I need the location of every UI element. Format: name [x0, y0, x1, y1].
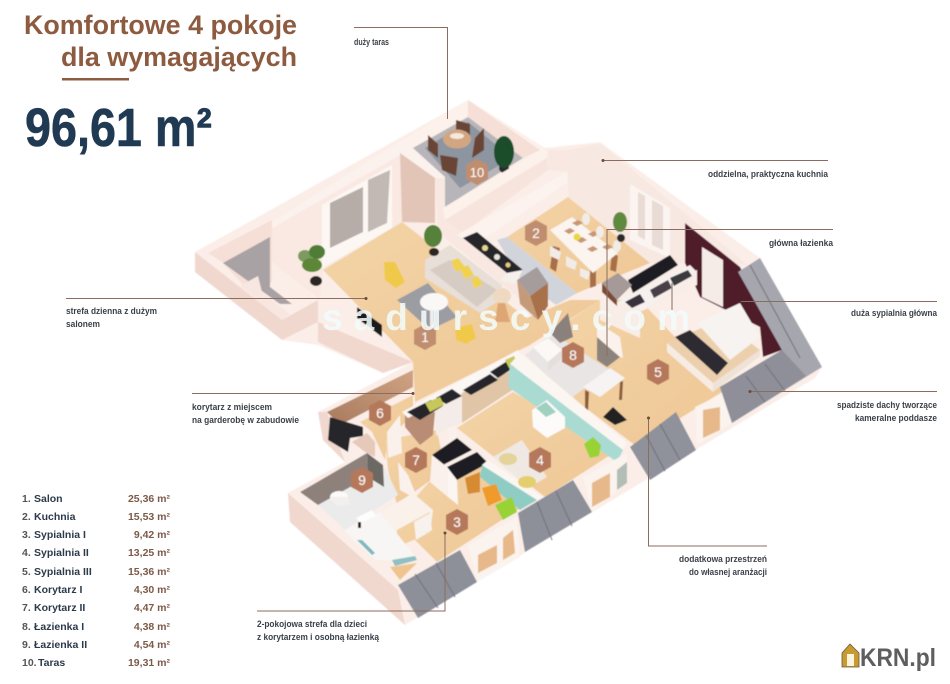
badge 8: 8: [569, 347, 577, 363]
room area list: 15,36 m²: [128, 566, 170, 578]
callout: strefa dzienna: [66, 297, 368, 329]
title: [24, 10, 297, 72]
room area list: Korytarz I: [34, 584, 83, 596]
callout: dachy: [748, 390, 937, 423]
callout: dachy: kameralne poddasze: [855, 413, 937, 423]
rug and table: [397, 283, 511, 330]
living room side wall: [435, 178, 527, 305]
badge 3: 3: [453, 514, 461, 530]
callout: sypialnia: duża sypialnia główna: [851, 308, 938, 318]
desk: [583, 368, 627, 425]
badge 9: [351, 467, 373, 493]
bedroom 4 floor: [457, 392, 618, 497]
badge 7: [405, 447, 427, 473]
room area list: 10.: [22, 657, 37, 669]
teal partition walls: [480, 353, 627, 510]
title: dla wymagających: [61, 42, 297, 72]
title underline: [62, 78, 129, 80]
callout: dodatkowa przestrzeń: dodatkowa przestrzeń: [679, 554, 767, 564]
badge 5: 5: [654, 364, 662, 380]
room area list: 1.: [22, 493, 31, 505]
title: Komfortowe 4 pokoje: [24, 10, 297, 40]
badge 8: [562, 342, 584, 368]
callout: taras: duży taras: [354, 37, 389, 47]
room area list: 3.: [22, 529, 31, 541]
badge 6: [369, 400, 391, 426]
wardrobes kids room: [430, 438, 488, 505]
room area list: 2.: [22, 511, 31, 523]
apartment shell: [195, 100, 822, 625]
wardrobe block: [600, 255, 697, 338]
bottom windows: [468, 390, 732, 582]
room area list: 25,36 m²: [128, 493, 170, 505]
floor plan: [195, 100, 822, 625]
callout: kuchnia: [602, 159, 829, 179]
living room floor: [323, 222, 600, 402]
badge 9: 9: [358, 472, 366, 488]
room area list: 8.: [22, 621, 31, 633]
callout: strefa dla dzieci: [257, 532, 446, 642]
kitchen windows: [630, 184, 670, 258]
badge 2: [525, 220, 547, 246]
terrace plant: [494, 136, 514, 173]
callout: strefa dzienna: strefa dzienna z dużym: [66, 306, 157, 316]
living room wall with windows: [272, 140, 443, 300]
room area list: Łazienka I: [34, 621, 84, 633]
room area list: 13,25 m²: [128, 547, 170, 559]
fridge cabinet: [517, 267, 548, 320]
plum accent wall: [685, 223, 782, 357]
callout: strefa dla dzieci: z korytarzem i osobną łazienką: [257, 632, 380, 642]
bathroom 9: [288, 433, 418, 588]
callout: strefa dla dzieci: 2-pokojowa strefa dla dzieci: [257, 619, 367, 629]
badge 7: 7: [412, 452, 420, 468]
watermark: sadurscy.com: [322, 297, 690, 338]
yellow armchairs: [384, 262, 476, 344]
terrace: [402, 100, 545, 207]
room area list: Sypialnia I: [34, 529, 86, 541]
kitchen counter: [463, 232, 523, 284]
TV: [357, 307, 382, 337]
outer wall faces: [195, 252, 413, 625]
room area list: Sypialnia III: [34, 566, 92, 578]
kitchen grey strip floor: [497, 237, 577, 305]
corridor 6: [327, 370, 413, 460]
callout: kuchnia: oddzielna, praktyczna kuchnia: [708, 169, 829, 179]
bedroom window: [702, 247, 723, 307]
room area list: [22, 493, 171, 669]
callout: strefa dzienna: salonem: [66, 319, 100, 329]
callout: łazienka: główna łazienka: [769, 238, 834, 248]
bedroom 3 furniture: [380, 472, 517, 547]
badge 10: [466, 159, 488, 185]
badge 1: 1: [421, 329, 429, 345]
room badges: [351, 159, 669, 535]
bedroom 5 floor: [555, 300, 725, 446]
callout: korytarz: korytarz z miejscem: [192, 402, 272, 412]
room area list: 4.: [22, 547, 31, 559]
corridor 7 floor: [385, 430, 445, 505]
badge 4: [529, 447, 551, 473]
wardrobes corridor: [402, 350, 522, 445]
room area list: Salon: [34, 493, 63, 505]
wall between terrace and kitchen: [443, 150, 568, 245]
badge 5: [647, 359, 669, 385]
room area list: 15,53 m²: [128, 511, 170, 523]
room area list: 4,30 m²: [134, 584, 171, 596]
kitchen plant: [613, 212, 627, 242]
room area list: 4,54 m²: [134, 639, 171, 651]
plants: [298, 225, 442, 286]
icon: house: [842, 644, 859, 667]
room area list: Łazienka II: [34, 639, 87, 651]
room area list: 19,31 m²: [128, 657, 170, 669]
callout: korytarz: [192, 392, 414, 425]
callout: dodatkowa przestrzeń: do własnej aranżacji: [689, 567, 767, 577]
room area list: Sypialnia II: [34, 547, 89, 559]
badge 3: [446, 509, 468, 535]
terrace table and chairs: [428, 120, 484, 176]
callout: łazienka: [607, 230, 834, 356]
bedroom 3 floor: [395, 465, 520, 562]
room area list: 4,38 m²: [134, 621, 171, 633]
room area list: 6.: [22, 584, 31, 596]
badge 4: 4: [536, 452, 544, 468]
room area list: Kuchnia: [34, 511, 76, 523]
roofs: [398, 258, 822, 618]
room area list: 5.: [22, 566, 31, 578]
dining table: [550, 213, 621, 288]
kitchen floor: [507, 197, 650, 293]
room area list: 9.: [22, 639, 31, 651]
bathroom 8: [520, 313, 623, 408]
bedroom 4 furniture: [493, 400, 601, 488]
callout: taras: [354, 28, 448, 119]
corridor doors: [387, 415, 456, 500]
total area: 96,61 m²: [25, 98, 212, 158]
sofa: [425, 245, 502, 313]
callout: dachy: spadziste dachy tworzące: [837, 400, 937, 410]
bed: [667, 303, 760, 392]
room area list: 9,42 m²: [134, 529, 171, 541]
small balcony: [208, 220, 292, 320]
room area list: 7.: [22, 602, 31, 614]
room area list: Taras: [38, 657, 65, 669]
badge 1: [414, 324, 436, 350]
badge 2: 2: [532, 225, 540, 241]
callout: korytarz: na garderobę w zabudowie: [192, 415, 299, 425]
badge 6: 6: [376, 405, 384, 421]
room area list: 4,47 m²: [134, 602, 171, 614]
callout: dodatkowa przestrzeń: [647, 416, 767, 577]
KRN.pl logo: KRN.pl: [860, 644, 936, 672]
kitchen back wall: [568, 143, 748, 265]
badge 10: 10: [470, 165, 484, 180]
room area list: Korytarz II: [34, 602, 85, 614]
